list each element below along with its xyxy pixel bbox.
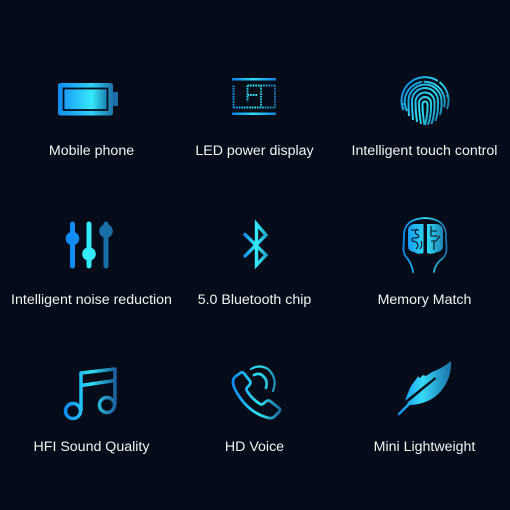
label: HD Voice: HD Voice [225, 439, 284, 455]
label: Intelligent touch control: Intelligent touch control [352, 143, 497, 159]
label: Mobile phone: Mobile phone [49, 143, 134, 159]
icon: music note [66, 369, 115, 418]
icon: brain in head [403, 218, 447, 272]
icon: feather [399, 361, 451, 414]
label: Mini Lightweight: Mini Lightweight [374, 439, 475, 455]
icon: equalizer sliders [66, 224, 113, 266]
label: Memory Match: Memory Match [378, 292, 471, 308]
icon: battery [58, 83, 118, 116]
label: HFI Sound Quality: HFI Sound Quality [34, 439, 150, 455]
label: LED power display: LED power display [195, 143, 315, 159]
label: Intelligent noise reduction: Intelligent noise reduction [11, 292, 172, 308]
icon: fingerprint [402, 77, 449, 125]
icon: LED power display [232, 78, 276, 115]
icon: phone with sound waves [233, 366, 280, 418]
label: 5.0 Bluetooth chip: 5.0 Bluetooth chip [198, 292, 311, 308]
icon: Bluetooth [245, 224, 266, 265]
